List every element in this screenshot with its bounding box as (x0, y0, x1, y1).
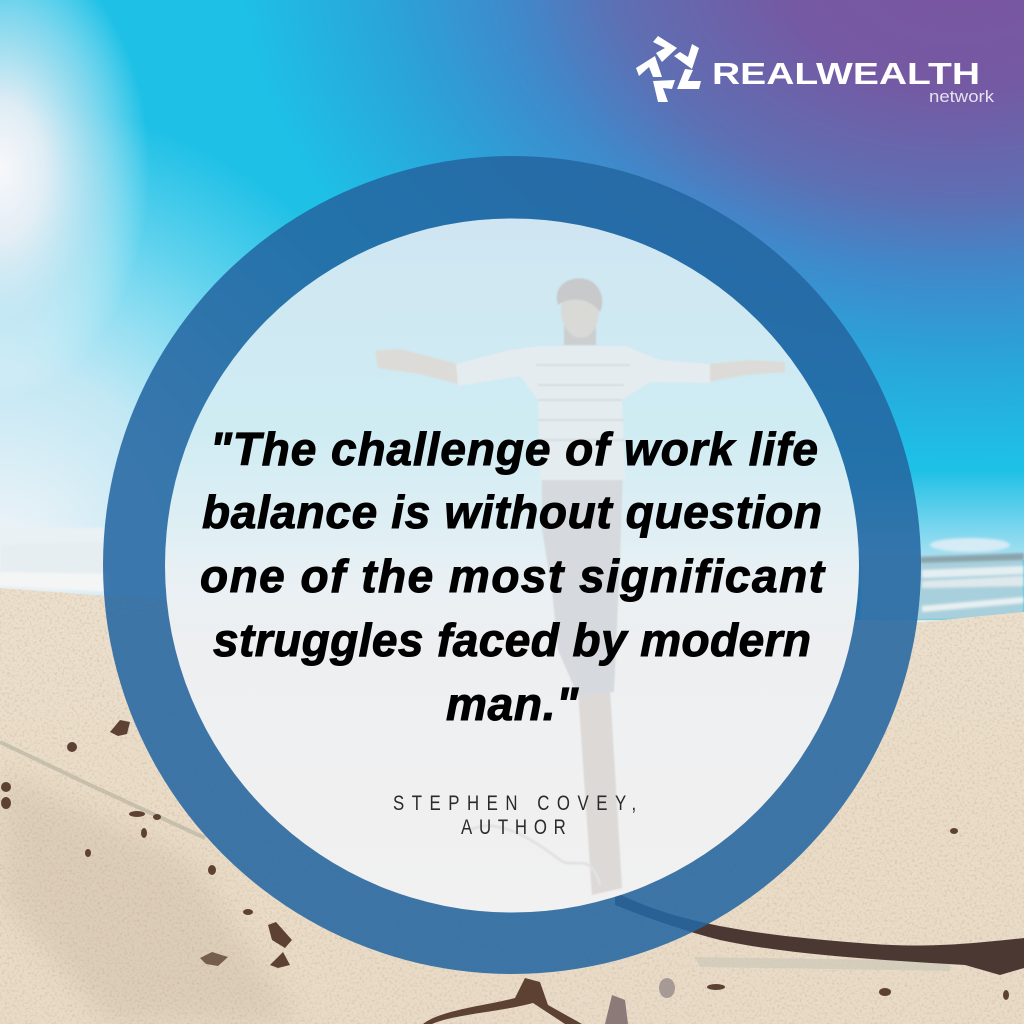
arms with hands (375, 349, 458, 384)
attribution: STEPHEN COVEY, (393, 792, 636, 816)
blue ring (103, 156, 921, 974)
quote text (200, 423, 826, 730)
quote text: man." (446, 678, 579, 730)
quote text: "The challenge of work life (210, 423, 818, 475)
background: man's shadow on sand (615, 892, 1024, 975)
shadow traces (470, 826, 600, 885)
attribution (393, 792, 636, 840)
legs (542, 470, 623, 696)
faded photo of man balancing on post (375, 278, 785, 895)
logo mark (636, 36, 701, 102)
quote text: balance is without question (202, 486, 822, 538)
logo wordmark: REALWEALTH (712, 57, 980, 91)
head (561, 282, 599, 338)
attribution: AUTHOR (461, 816, 566, 840)
background: beach debris (1, 720, 1009, 1024)
quote text: one of the most significant (200, 550, 826, 602)
inner pale circle (165, 218, 859, 912)
background: sea (0, 528, 1024, 622)
background: sky (0, 0, 1024, 620)
logo subtitle: network (929, 87, 995, 106)
quote text: struggles faced by modern (213, 614, 811, 666)
shirt stripes (536, 365, 630, 440)
background: sand beach (0, 585, 1024, 1024)
logo: Real Wealth Network (636, 36, 995, 106)
post (578, 690, 622, 895)
